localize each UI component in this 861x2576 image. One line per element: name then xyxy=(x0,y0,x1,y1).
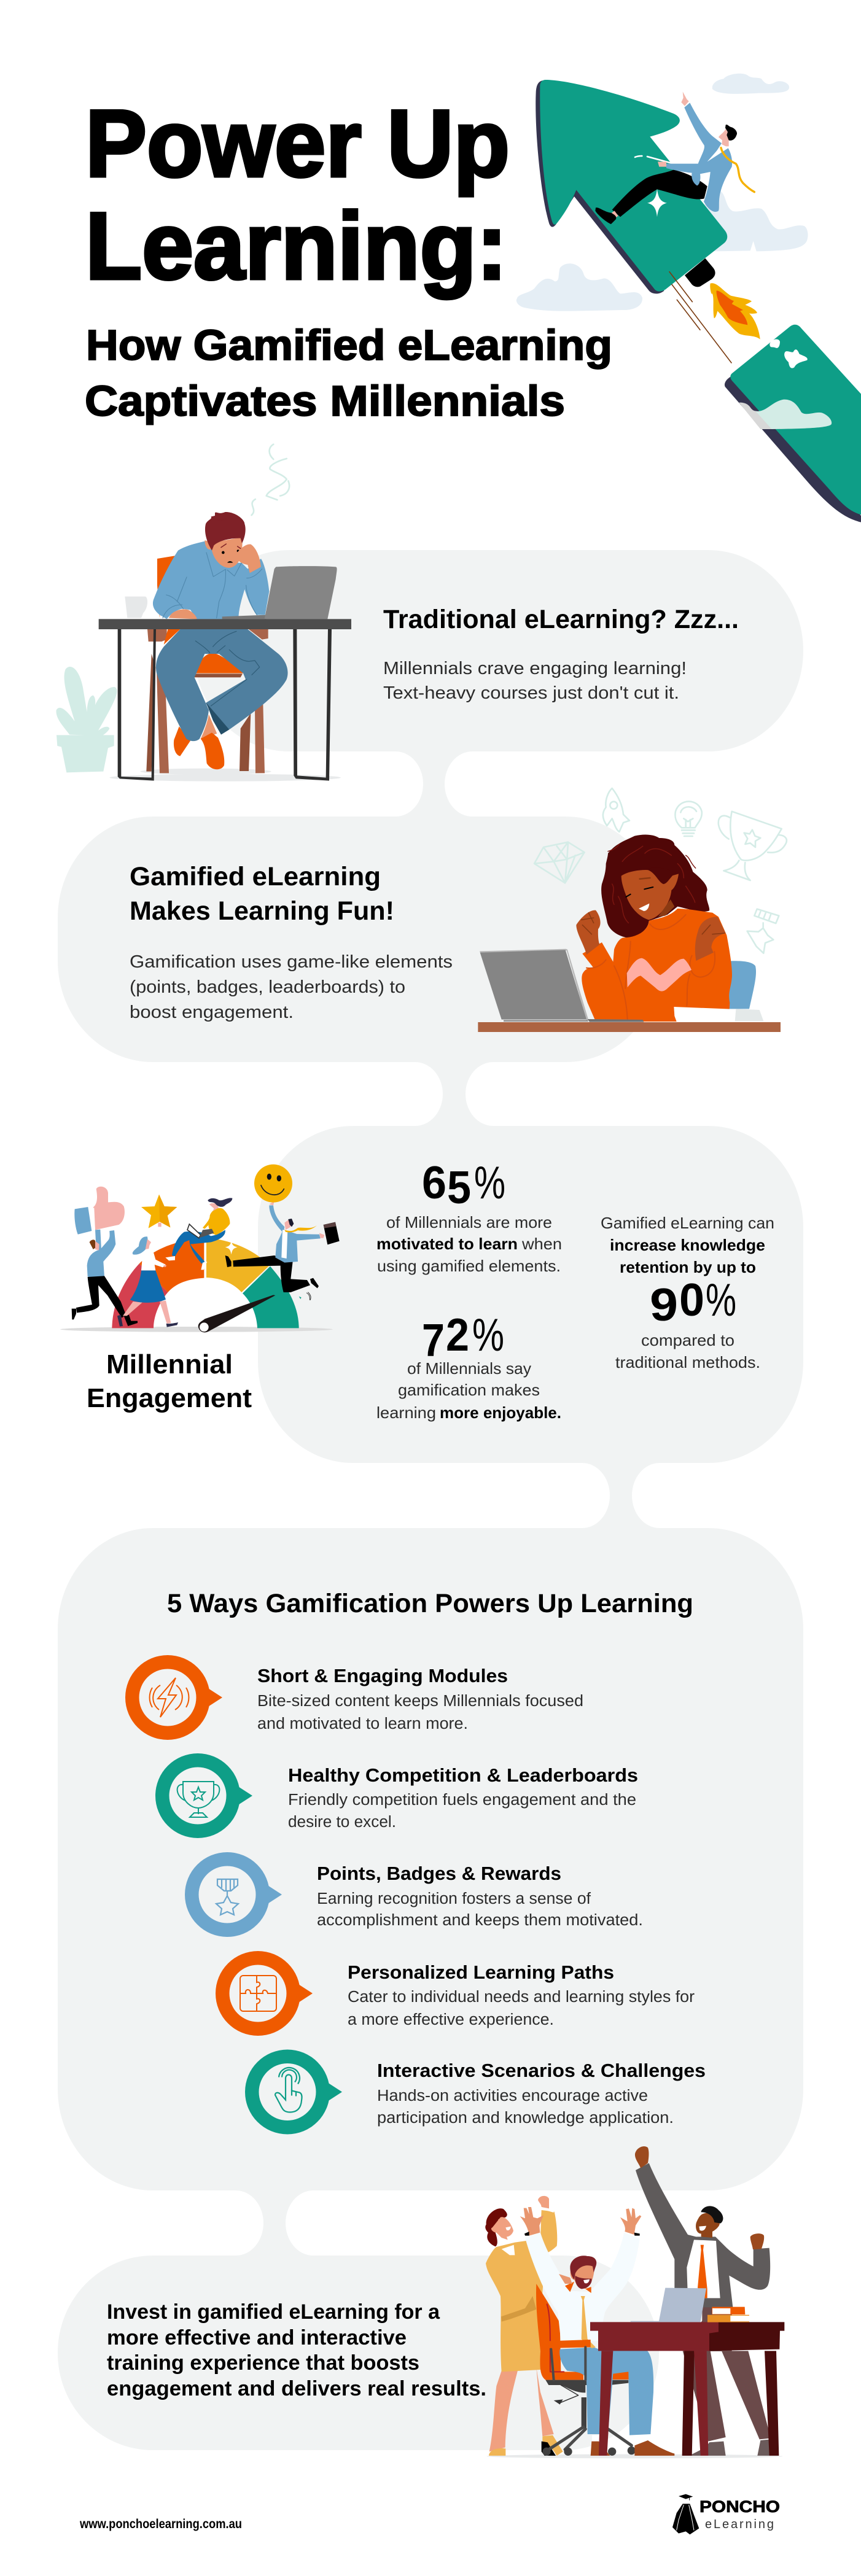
title: Learning: xyxy=(85,193,507,299)
list item: short and engaging modules xyxy=(125,1655,583,1740)
text: traditional eLearning body: Text-heavy courses just don't cut it. xyxy=(383,683,679,703)
stat: 90 percent retention: 9 xyxy=(650,1279,678,1330)
list item: interactive scenarios and challenges xyxy=(245,2049,706,2134)
illustration: celebrating team at desk xyxy=(485,2146,784,2458)
stat: 90 percent retention: % xyxy=(706,1274,736,1325)
title: Power Up xyxy=(85,90,510,196)
stat: 72 percent enjoyable: % xyxy=(472,1309,504,1360)
text: call to action xyxy=(107,2300,486,2400)
panel: statistics background xyxy=(258,1126,803,1463)
text: call to action: engagement and delivers real results. xyxy=(107,2377,486,2400)
illustration: bored man at desk xyxy=(56,444,351,782)
panel: five ways background xyxy=(58,1528,803,2190)
stat: 90 percent retention: increase knowledge xyxy=(610,1236,765,1254)
logo: Poncho eLearning: eLearning xyxy=(705,2518,774,2531)
icon: puzzle xyxy=(216,1951,313,2036)
panel: call to action background xyxy=(58,2256,659,2450)
heading: gamified eLearning: Gamified eLearning xyxy=(130,862,381,891)
subtitle xyxy=(85,321,612,425)
heading: five ways: 5 Ways Gamification Powers Up Learning xyxy=(167,1589,693,1618)
stat: 90 percent retention: retention by up to xyxy=(620,1258,756,1276)
icon: lightning bolt xyxy=(125,1655,222,1740)
text: traditional eLearning body xyxy=(383,659,687,703)
list item: personalized learning paths: Cater to individual needs and learning styles for xyxy=(348,1988,695,2006)
stat: 90 percent retention: 0 xyxy=(679,1274,704,1325)
list item: personalized learning paths: a more effective experience. xyxy=(348,2011,554,2028)
list item: points, badges and rewards: accomplishment and keeps them motivated. xyxy=(317,1912,643,1929)
list item: points, badges and rewards: Earning recognition fosters a sense of xyxy=(317,1890,591,1907)
heading: gamified eLearning: Makes Learning Fun! xyxy=(130,896,394,926)
list item: short and engaging modules: and motivated to learn more. xyxy=(257,1715,468,1732)
list item: short and engaging modules: Bite-sized content keeps Millennials focused xyxy=(257,1693,583,1710)
list item: healthy competition and leaderboards: desire to excel. xyxy=(288,1814,396,1831)
icon: trophy xyxy=(155,1753,252,1838)
list item: personalized learning paths: Personalized Learning Paths xyxy=(348,1961,614,1983)
stat: 72 percent enjoyable: learning xyxy=(376,1403,436,1422)
stat: 72 percent enjoyable: of Millennials say xyxy=(407,1359,531,1378)
stat: 90 percent retention xyxy=(601,1214,774,1371)
stat: 72 percent enjoyable: 2 xyxy=(446,1309,469,1360)
subtitle: How Gamified eLearning xyxy=(86,321,612,369)
list item: points, badges and rewards: Points, Badges & Rewards xyxy=(317,1863,561,1884)
panel: gamified eLearning background xyxy=(58,817,661,1062)
stat: 65 percent motivated: motivated to learn xyxy=(376,1235,518,1253)
stat: 65 percent motivated: 6 xyxy=(422,1157,446,1208)
text: call to action: training experience that boosts xyxy=(107,2351,419,2375)
heading: millennial engagement: Engagement xyxy=(87,1383,252,1413)
heading: traditional eLearning: Traditional eLearning? Zzz... xyxy=(383,605,739,634)
illustration: millennial engagement gauge with people xyxy=(60,1165,340,1332)
stat: 90 percent retention: compared to xyxy=(641,1331,734,1349)
stat: 72 percent enjoyable: 7 xyxy=(422,1314,445,1366)
stat: 90 percent retention: Gamified eLearning can xyxy=(601,1214,774,1232)
list item: personalized learning paths xyxy=(216,1951,695,2036)
text: call to action: more effective and interactive xyxy=(107,2326,407,2349)
subtitle: Captivates Millennials xyxy=(85,377,565,425)
heading: millennial engagement xyxy=(87,1349,252,1413)
illustration: rocket arrow with businessman xyxy=(516,74,808,363)
list item: healthy competition and leaderboards xyxy=(155,1753,638,1838)
heading: millennial engagement: Millennial xyxy=(106,1349,233,1379)
list item: interactive scenarios and challenges: Interactive Scenarios & Challenges xyxy=(377,2060,706,2081)
stat: 65 percent motivated: 5 xyxy=(447,1162,471,1213)
list item: short and engaging modules: Short & Engaging Modules xyxy=(257,1665,508,1686)
list item: interactive scenarios and challenges: participation and knowledge application. xyxy=(377,2109,674,2127)
stat: 65 percent motivated: of Millennials are more xyxy=(386,1213,552,1232)
list item: healthy competition and leaderboards: Friendly competition fuels engagement and the xyxy=(288,1791,636,1809)
text: call to action: Invest in gamified eLearning for a xyxy=(107,2300,440,2324)
heading: gamified eLearning xyxy=(130,862,394,926)
icon: pointing hand xyxy=(245,2049,342,2134)
text: traditional eLearning body: Millennials crave engaging learning! xyxy=(383,659,687,678)
stat: 90 percent retention: traditional methods. xyxy=(615,1353,760,1371)
logo: Poncho eLearning: PONCHO xyxy=(699,2497,780,2516)
stat: 65 percent motivated xyxy=(376,1157,562,1275)
stat: 65 percent motivated: when xyxy=(521,1235,562,1253)
logo: Poncho eLearning xyxy=(672,2494,780,2534)
list item: healthy competition and leaderboards: Healthy Competition & Leaderboards xyxy=(288,1764,638,1786)
illustration: happy woman with laptop xyxy=(478,788,787,1032)
text: gamified eLearning body: Gamification uses game-like elements xyxy=(130,952,453,972)
list item: points, badges and rewards xyxy=(185,1852,643,1937)
stat: 65 percent motivated: using gamified elements. xyxy=(377,1257,561,1275)
stat: 65 percent motivated: % xyxy=(474,1157,505,1208)
text: gamified eLearning body: (points, badges, leaderboards) to xyxy=(130,977,405,997)
panel: traditional eLearning background xyxy=(194,550,803,751)
stat: 72 percent enjoyable: more enjoyable. xyxy=(440,1403,561,1422)
text: website url: www.ponchoelearning.com.au xyxy=(79,2517,242,2531)
stat: 72 percent enjoyable xyxy=(376,1309,561,1422)
list item: interactive scenarios and challenges: Hands-on activities encourage active xyxy=(377,2087,648,2105)
icon: medal xyxy=(185,1852,282,1937)
text: gamified eLearning body xyxy=(130,952,453,1022)
title xyxy=(85,90,510,299)
stat: 72 percent enjoyable: gamification makes xyxy=(398,1381,540,1399)
text: gamified eLearning body: boost engagement. xyxy=(130,1003,294,1022)
